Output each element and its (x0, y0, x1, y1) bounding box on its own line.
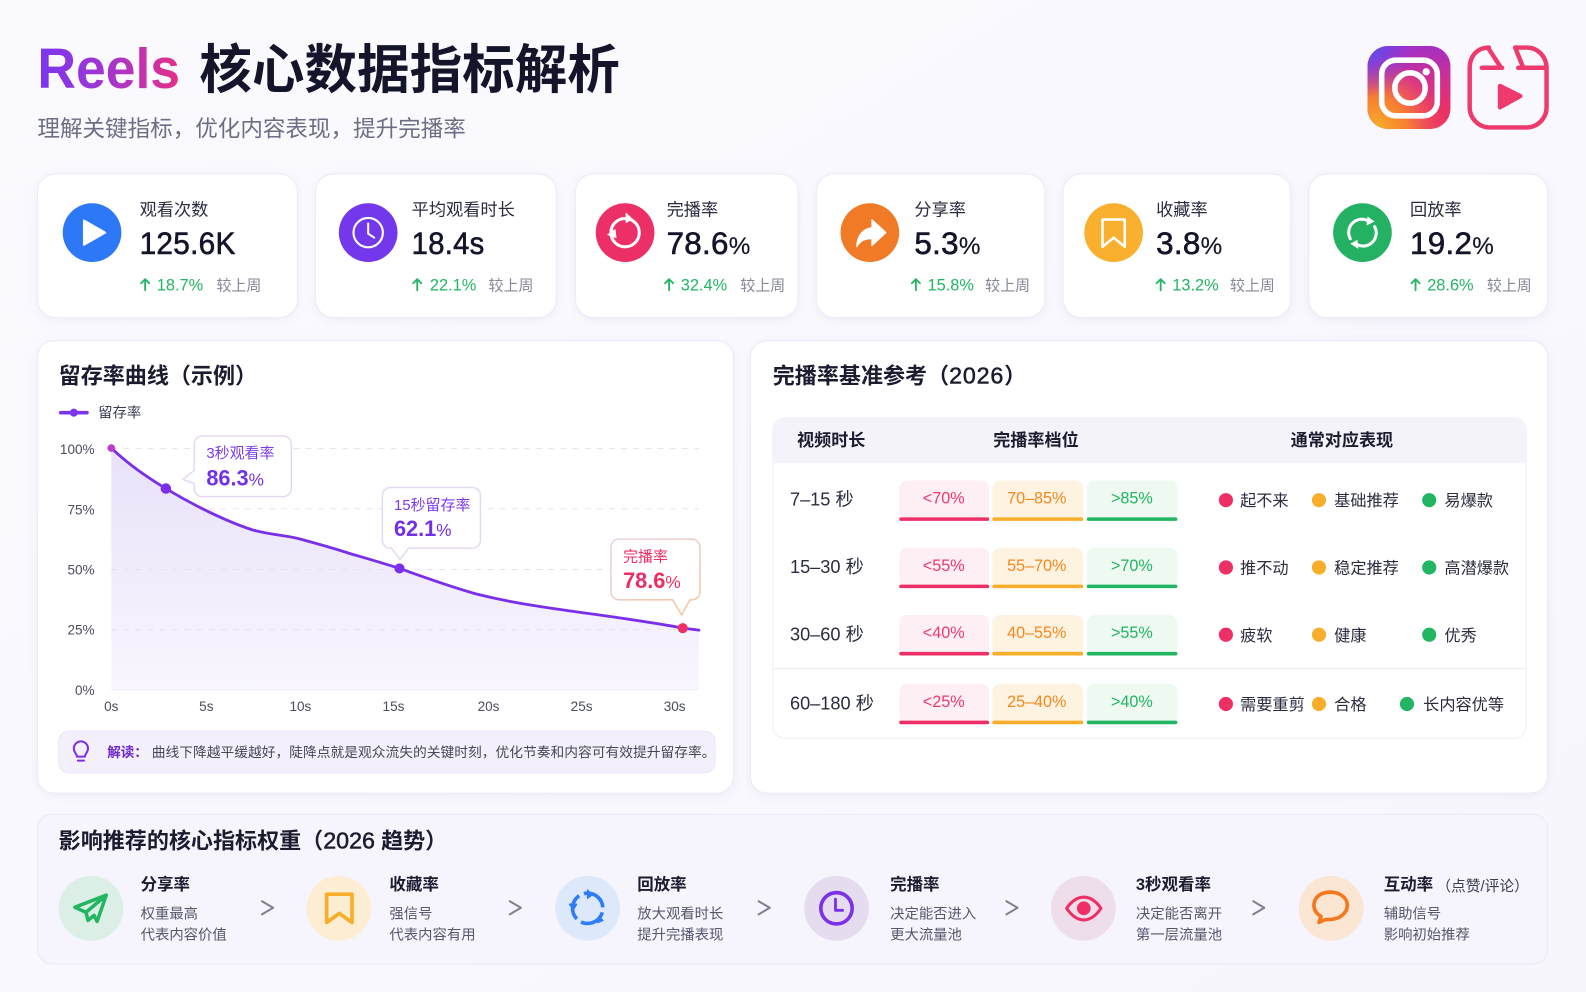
table header (797, 430, 1393, 450)
icon: paper plane (59, 876, 123, 941)
item: 收藏率: 代表内容有用 (389, 927, 476, 944)
panel: KPI 分享率: 15.8% (928, 276, 974, 294)
callout: 15秒留存率 (382, 488, 480, 559)
callout: 3秒观看率 (183, 436, 291, 497)
row: 15-30 秒: 推不动 (1240, 560, 1289, 578)
callout: interpretation (59, 731, 715, 773)
row: 30-60 秒: <40% (923, 624, 965, 642)
row: 15-30 秒: 稳定推荐 (1334, 560, 1399, 578)
item: 3秒观看率: 第一层流量池 (1136, 926, 1222, 944)
panel: KPI 分享率: 5.3% (914, 226, 981, 261)
line chart: 100% (60, 442, 95, 457)
row: 7-15 秒: >85% (1111, 490, 1153, 508)
icon: share arrow (841, 203, 899, 262)
row: 30-60 秒: >55% (1111, 624, 1153, 642)
item: 3秒观看率 (1051, 875, 1222, 944)
item: 收藏率: 收藏率 (389, 875, 439, 894)
panel: KPI 回放率: 较上周 (1487, 276, 1532, 294)
heading: recommendation weights: 影响推荐的核心指标权重（2026 趋势） (59, 828, 447, 854)
table (773, 418, 1526, 738)
panel: KPI 平均观看时长: 较上周 (489, 276, 533, 294)
item: 分享率: 权重最高 (141, 905, 198, 922)
table header: 视频时长 (797, 431, 865, 450)
heading: completion benchmark: 完播率基准参考（2026） (773, 362, 1026, 388)
panel: KPI 完播率: 78.6% (667, 226, 751, 261)
item: 回放率 (555, 875, 723, 944)
row: 15-30 秒: <55% (923, 557, 965, 575)
arrow (1253, 901, 1264, 914)
row: 15-30 秒: >70% (1111, 557, 1153, 575)
panel: KPI 回放率: 19.2% (1410, 226, 1494, 261)
callout: interpretation: 曲线下降越平缓越好，陡降点就是观众流失的关键时刻，优化节奏和内容可有效提升留存率。 (152, 744, 715, 760)
panel: KPI 回放率: 28.6% (1427, 276, 1474, 294)
row: 7-15 秒: 易爆款 (1444, 491, 1493, 510)
panel: completion benchmark (751, 341, 1548, 793)
row: 7-15 秒 (790, 480, 1493, 521)
line chart: 25s (571, 699, 593, 714)
panel: KPI 观看次数: 较上周 (216, 276, 261, 294)
callout: 完播率: 78.6% (623, 568, 681, 593)
panel: KPI 观看次数: 125.6K (140, 226, 236, 261)
line chart: 75% (67, 502, 95, 517)
row: 30-60 秒: 疲软 (1240, 627, 1272, 645)
line chart: 20s (478, 699, 500, 714)
row: 60-180 秒: <25% (923, 693, 965, 711)
row: 60-180 秒: 需要重剪 (1240, 696, 1305, 714)
item: 互动率: 辅助信号 (1384, 905, 1441, 922)
line chart: 0s (104, 699, 119, 714)
item: 分享率: 代表内容价值 (141, 927, 227, 944)
subtitle: 理解关键指标，优化内容表现，提升完播率 (37, 117, 466, 142)
row: 30-60 秒: 健康 (1334, 627, 1367, 645)
icon: refresh (1333, 203, 1392, 262)
row: 7-15 秒: <70% (923, 490, 965, 508)
callout: 3秒观看率: 3秒观看率 (206, 445, 275, 462)
item: 互动率: （点赞/评论） (1436, 878, 1529, 895)
item: 收藏率: 强信号 (389, 905, 433, 922)
arrow (510, 901, 521, 914)
panel: KPI 观看次数: 18.7% (157, 276, 203, 294)
arrow (1006, 901, 1018, 914)
panel: KPI 收藏率 (1063, 174, 1291, 318)
icon: light bulb (74, 741, 88, 761)
callout: 15秒留存率: 15秒留存率 (394, 497, 470, 514)
panel: KPI 完播率: 完播率 (667, 199, 718, 219)
panel: recommendation weights (37, 814, 1548, 964)
panel: KPI 收藏率: 3.8% (1156, 226, 1222, 261)
line chart: 30s (664, 699, 686, 714)
item: 互动率: 影响初始推荐 (1384, 927, 1470, 944)
icon: speech bubble (1299, 876, 1363, 941)
row: 60-180 秒: 25–40% (1007, 693, 1066, 711)
icon: eye (1051, 876, 1116, 941)
icon: reels logo (1470, 48, 1547, 127)
item: 完播率: 决定能否进入 (890, 905, 976, 922)
icon: bookmark (306, 876, 371, 941)
table header: 通常对应表现 (1291, 430, 1393, 450)
panel: retention curve (37, 341, 733, 793)
icon: replay (555, 876, 620, 941)
panel: KPI 收藏率: 较上周 (1230, 276, 1275, 294)
row: 60-180 秒: 长内容优等 (1423, 696, 1504, 714)
legend: 留存率 (98, 405, 141, 422)
callout: 完播率 (611, 539, 700, 615)
row: 60-180 秒: 60–180 秒 (790, 694, 874, 714)
heading: retention curve: 留存率曲线（示例） (59, 363, 257, 388)
row: 7-15 秒: 70–85% (1007, 490, 1066, 508)
item: 回放率: 回放率 (637, 875, 687, 894)
item: 回放率: 提升完播表现 (637, 927, 723, 944)
callout: 3秒观看率: 86.3% (206, 466, 264, 491)
icon: replay circle (596, 203, 654, 262)
line chart: 25% (67, 623, 95, 638)
panel: KPI 平均观看时长 (316, 174, 556, 318)
icon: play (63, 203, 121, 262)
panel: KPI 分享率: 较上周 (985, 276, 1030, 294)
item: 完播率 (804, 875, 976, 944)
callout: 15秒留存率: 62.1% (394, 516, 452, 541)
callout: 完播率: 完播率 (623, 548, 668, 565)
item: 3秒观看率: 决定能否离开 (1136, 905, 1222, 922)
line chart: 50% (67, 563, 95, 578)
legend (61, 405, 141, 422)
title: Reels (37, 38, 180, 101)
panel: KPI 收藏率: 收藏率 (1156, 199, 1208, 219)
panel: KPI 回放率 (1309, 174, 1548, 318)
title (37, 38, 620, 101)
row: 15-30 秒: 15–30 秒 (790, 557, 864, 577)
row: 15-30 秒: 55–70% (1007, 557, 1066, 575)
arrow (262, 901, 273, 914)
title: 核心数据指标解析 (199, 41, 620, 100)
item: 分享率: 分享率 (141, 875, 190, 894)
panel: KPI 平均观看时长: 18.4s (412, 226, 484, 261)
panel: KPI 平均观看时长: 平均观看时长 (412, 199, 515, 219)
row: 30-60 秒: 30–60 秒 (790, 624, 864, 644)
item: 互动率: 互动率 (1384, 875, 1433, 894)
panel: KPI 完播率: 32.4% (681, 276, 727, 294)
row: 30-60 秒: 优秀 (1444, 627, 1477, 645)
panel: KPI 回放率: 回放率 (1410, 199, 1462, 219)
row: 7-15 秒: 基础推荐 (1334, 492, 1399, 510)
icon: clock (804, 876, 869, 941)
item: 完播率: 更大流量池 (890, 927, 962, 944)
panel: KPI 观看次数: 观看次数 (140, 199, 208, 219)
item: 回放率: 放大观看时长 (637, 905, 723, 922)
icon: instagram logo (1368, 46, 1450, 129)
item: 收藏率 (306, 875, 476, 944)
line chart: 5s (199, 699, 214, 714)
panel: KPI 平均观看时长: 22.1% (430, 276, 476, 294)
row: 60-180 秒: 合格 (1334, 696, 1367, 714)
icon: bookmark (1084, 203, 1143, 262)
panel: KPI 完播率 (576, 174, 798, 318)
panel: KPI 分享率 (816, 174, 1045, 318)
row: 30-60 秒: 40–55% (1007, 624, 1066, 642)
table header: 完播率档位 (993, 430, 1079, 450)
line chart: 15s (383, 699, 405, 714)
row: 60-180 秒: >40% (1111, 693, 1153, 711)
row: 15-30 秒 (790, 548, 1509, 588)
callout: interpretation: 解读： (107, 744, 148, 760)
panel: KPI 收藏率: 13.2% (1172, 276, 1219, 294)
item: 完播率: 完播率 (890, 875, 940, 894)
row: 7-15 秒: 7–15 秒 (790, 490, 854, 510)
item: 互动率 (1299, 875, 1529, 944)
item: 分享率 (59, 875, 227, 944)
item: 3秒观看率: 3秒观看率 (1136, 875, 1211, 894)
panel: KPI 完播率: 较上周 (740, 276, 785, 294)
row: 7-15 秒: 起不来 (1240, 492, 1289, 510)
line chart: 0% (75, 683, 95, 698)
panel: KPI 观看次数 (37, 174, 297, 318)
row: 15-30 秒: 高潜爆款 (1444, 559, 1509, 578)
icon: clock (339, 203, 398, 262)
line chart: 10s (289, 699, 312, 714)
line chart (60, 442, 699, 714)
row: 30-60 秒 (790, 615, 1477, 655)
row: 60-180 秒 (790, 684, 1504, 724)
arrow (759, 901, 770, 914)
panel: KPI 分享率: 分享率 (914, 199, 966, 219)
